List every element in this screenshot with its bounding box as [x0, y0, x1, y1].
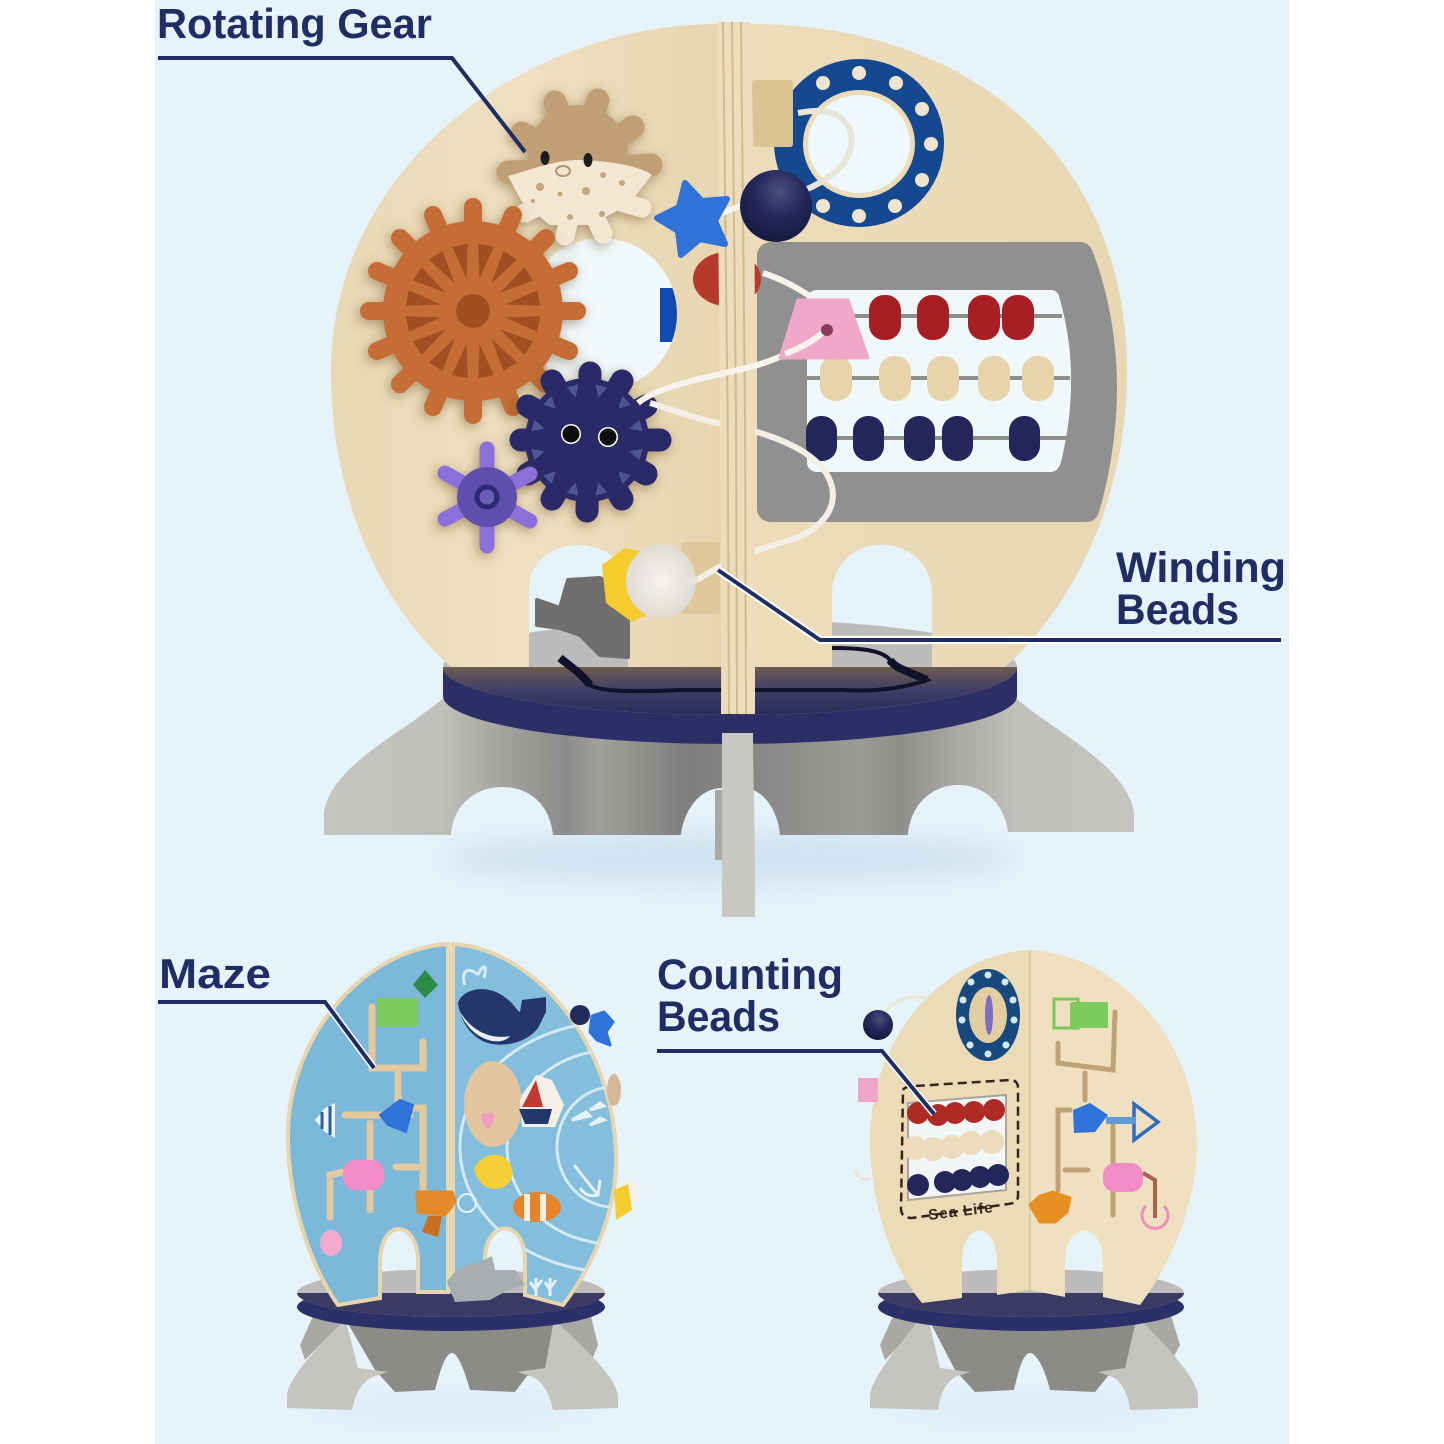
blue peg — [1073, 1103, 1108, 1133]
main toy: rocket activity center — [324, 22, 1134, 917]
white ball — [626, 544, 696, 618]
abacus rods — [807, 316, 1070, 438]
porthole with heart — [464, 1061, 522, 1147]
background panel — [155, 0, 1289, 1444]
callout: Maze: Maze — [159, 950, 271, 997]
wood beads — [820, 356, 1054, 401]
beads behind right — [607, 1074, 621, 1106]
pufferfish gear — [508, 100, 652, 236]
orange gear — [369, 207, 577, 415]
callout: Counting Beads: Beads — [657, 993, 780, 1041]
wood toy left panel — [870, 950, 1030, 1303]
pink trapezoid bead — [780, 300, 868, 358]
main toy floor shadow — [439, 832, 1019, 884]
blue peg — [380, 1100, 413, 1132]
main toy legs — [324, 697, 1134, 835]
fish icons — [572, 1103, 604, 1125]
sea life label: Sea Life — [927, 1199, 995, 1224]
center plank — [717, 22, 755, 714]
fountain icon — [463, 967, 485, 985]
boat — [519, 1075, 564, 1127]
navy ball — [863, 1010, 893, 1040]
callout: Counting Beads: Counting — [657, 951, 843, 999]
callout: Maze — [158, 950, 374, 1068]
blue toy right wing — [517, 1322, 618, 1410]
blue toy right panel — [453, 944, 616, 1305]
abacus gray frame with hole — [757, 242, 1117, 522]
rear fin shadow — [715, 790, 725, 860]
red bead on wire — [693, 252, 761, 306]
slots — [1058, 1012, 1115, 1215]
pink bead — [858, 1078, 878, 1102]
maze slots — [330, 1007, 423, 1217]
front wire sections — [638, 198, 825, 403]
blue toy left panel — [288, 944, 448, 1305]
wood peg top — [752, 80, 793, 147]
wood toy base disc — [878, 1269, 1184, 1331]
lower star — [422, 1216, 442, 1237]
purple gear — [445, 449, 530, 546]
green peg — [1070, 1002, 1108, 1028]
striped fish — [315, 1103, 335, 1138]
gray shark figure — [537, 578, 628, 657]
coral icon — [530, 1278, 556, 1296]
wood peg bottom — [681, 542, 720, 614]
blue toy center legs — [347, 1322, 555, 1392]
callout: Winding Beads: Beads — [1116, 586, 1239, 634]
wood toy center legs — [930, 1322, 1137, 1392]
wood toy right panel — [1030, 950, 1197, 1305]
arrow icon — [1106, 1104, 1158, 1140]
clownfish — [513, 1192, 561, 1222]
wire loop behind — [880, 997, 925, 1020]
callout: Rotating Gear — [157, 0, 525, 152]
main toy left wood panel — [331, 24, 722, 667]
blue toy floor shadow — [302, 1400, 602, 1416]
yellow bead — [614, 1184, 632, 1220]
callout: Winding Beads: Winding — [1116, 544, 1286, 592]
anchor icon — [574, 1165, 600, 1196]
fold line — [1029, 950, 1031, 1290]
white wire bit — [855, 1170, 870, 1179]
green peg — [377, 998, 418, 1027]
center fin — [722, 733, 755, 917]
blue toy left wing — [287, 1322, 388, 1410]
blue toy base disc — [297, 1269, 605, 1331]
main toy right wood panel — [750, 24, 1127, 667]
pink peg — [343, 1160, 384, 1190]
pink peg — [1103, 1163, 1143, 1192]
callout: Winding Beads — [718, 544, 1286, 640]
yellow hex bead — [602, 548, 652, 622]
green frame — [1054, 999, 1078, 1028]
callout: Counting Beads — [657, 951, 934, 1114]
power icon — [1142, 1173, 1168, 1228]
blue toy white rings — [458, 1024, 610, 1272]
wood toy back wings — [880, 1312, 1180, 1360]
icon: navy ring — [774, 59, 944, 227]
porthole window — [525, 238, 677, 390]
navy beads — [806, 416, 1040, 461]
small wood toy — [855, 950, 1198, 1416]
navy ball — [740, 170, 812, 242]
wood toy right wing — [1098, 1322, 1198, 1410]
compass icon — [458, 1194, 476, 1212]
sea life dashed box — [901, 1080, 1018, 1218]
orange star — [1030, 1192, 1070, 1222]
blue star — [590, 1012, 613, 1045]
wood toy left wing — [870, 1322, 970, 1410]
orange star — [417, 1192, 455, 1215]
abacus window — [807, 290, 1071, 472]
blue block behind porthole — [660, 288, 677, 342]
turtle icon — [413, 970, 438, 998]
abacus window — [908, 1095, 1006, 1200]
small blue toy — [286, 942, 640, 1410]
navy ball behind — [570, 1005, 590, 1025]
callout: Rotating Gear: Rotating Gear — [157, 0, 432, 47]
main toy base disc — [443, 619, 1017, 744]
blue star bead — [657, 183, 727, 255]
gray shark — [447, 1256, 525, 1302]
abacus beads — [903, 1099, 1009, 1196]
blue toy back wings — [300, 1312, 598, 1360]
pink octopus — [320, 1230, 342, 1256]
blue toy center line — [448, 944, 452, 1292]
white bead behind — [616, 1180, 640, 1204]
red beads — [869, 295, 1034, 340]
back wire section — [650, 403, 833, 580]
navy urchin gear — [521, 373, 660, 511]
whale — [458, 989, 546, 1045]
wire into white ball — [678, 580, 697, 585]
wood toy floor shadow — [883, 1400, 1183, 1416]
yellow shell — [474, 1155, 512, 1189]
porthole ring — [956, 969, 1020, 1061]
top wire loop — [798, 111, 852, 190]
